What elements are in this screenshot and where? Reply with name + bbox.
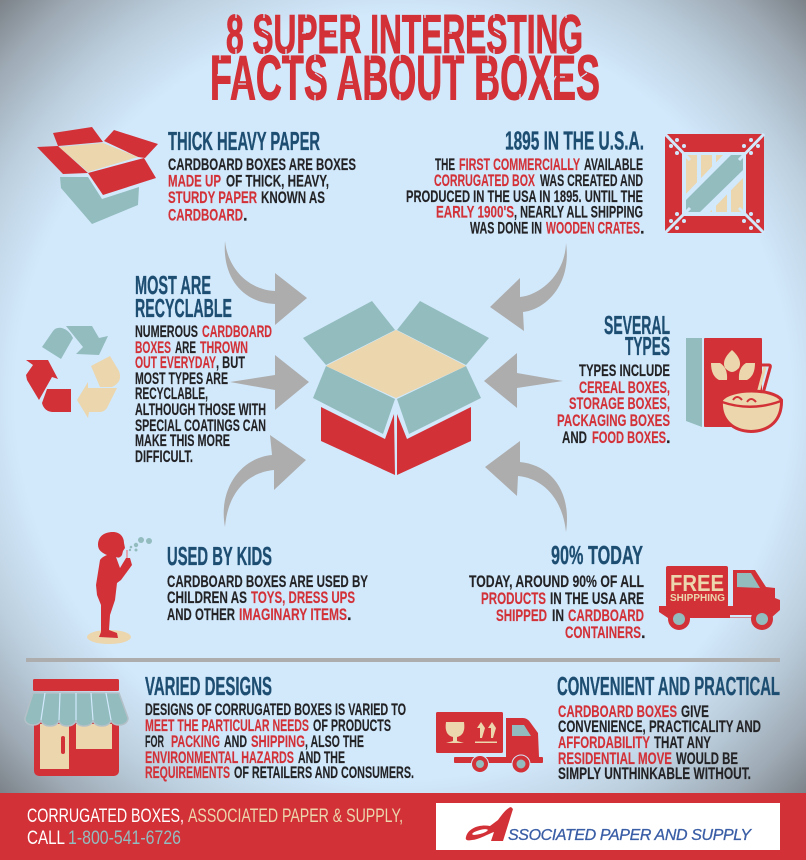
text block: most are recyclable: ARE (175, 339, 196, 357)
text block: convenient and practical: AFFORDABILITY (558, 734, 650, 752)
panel: convenient and practical (557, 671, 780, 783)
footer text: CORRUGATED BOXES, (27, 806, 184, 827)
text block: convenient and practical: THAT ANY (654, 734, 711, 752)
arrow: top left (225, 241, 307, 325)
text block: convenient and practical: RESIDENTIAL MOVE (558, 750, 672, 768)
heading: most are recyclable (135, 270, 232, 323)
icon: storefront (25, 679, 128, 776)
divider (26, 658, 780, 662)
text block: several types: FOOD BOXES (592, 429, 666, 447)
text block: thick heavy paper: KNOWN AS (261, 189, 325, 207)
heading: most are recyclable: RECYCLABLE (135, 293, 232, 323)
panel: most are recyclable (135, 270, 272, 466)
text block: used by kids: TOYS, DRESS UPS (251, 589, 355, 607)
footer text (27, 806, 403, 849)
panel: 1895 in the usa (406, 126, 645, 238)
icon: free shipping truck: FREE (670, 570, 724, 596)
arrow: bottom right (485, 441, 567, 532)
text block: thick heavy paper (168, 156, 356, 224)
text block: used by kids: CHILDREN AS (167, 589, 247, 607)
text block: 90 percent today: IN THE USA ARE (550, 590, 644, 608)
text block: 1895 in the usa: EARLY 1900'S (436, 204, 514, 222)
text block: convenient and practical: GIVE (681, 703, 709, 721)
text block: 90 percent today: PRODUCTS (481, 590, 546, 608)
text block: most are recyclable (135, 323, 272, 466)
icon: central open box (303, 301, 489, 475)
text block: used by kids: . (347, 606, 352, 624)
text block: thick heavy paper: OF THICK, HEAVY, (226, 172, 329, 190)
text block: 1895 in the usa: . (640, 220, 645, 238)
text block: 1895 in the usa: WAS DONE IN (470, 220, 542, 238)
icon: recycling arrows (26, 326, 120, 418)
text block: 1895 in the usa: PRODUCED IN THE USA IN 1895. UNTIL THE (406, 188, 643, 206)
panel: thick heavy paper (168, 126, 356, 224)
text block: several types: PACKAGING BOXES (557, 412, 670, 430)
text block: several types: STORAGE BOXES, (569, 395, 670, 413)
text block: most are recyclable: BOXES (135, 339, 171, 357)
text block: most are recyclable: ALTHOUGH THOSE WITH (135, 401, 266, 419)
text block: varied designs: SHIPPING (251, 733, 305, 751)
text block: used by kids (167, 573, 368, 624)
text block: most are recyclable: OUT EVERYDAY (135, 354, 216, 372)
text block: several types: AND (562, 429, 587, 447)
text block: 1895 in the usa: WOODEN CRATES (546, 220, 640, 238)
heading: used by kids: USED BY KIDS (167, 541, 272, 571)
logo: associated paper and supply (436, 803, 780, 850)
text block: varied designs: OF RETAILERS AND CONSUMERS. (234, 764, 414, 782)
text block: convenient and practical: WOULD BE (676, 750, 738, 768)
heading: most are recyclable: MOST ARE (135, 270, 211, 300)
text block: 1895 in the usa: FIRST COMMERCIALLY (459, 156, 580, 174)
text block: 1895 in the usa: THE (435, 156, 455, 174)
footer text: 1-800-541-6726 (68, 828, 181, 849)
text block: thick heavy paper: MADE UP (168, 172, 221, 190)
text block: most are recyclable: RECYCLABLE, (135, 385, 208, 403)
text block: 90 percent today: CARDBOARD (568, 607, 644, 625)
text block: convenient and practical (558, 703, 761, 783)
panel: used by kids (167, 541, 368, 624)
heading: 1895 in the usa: 1895 IN THE U.S.A. (505, 126, 644, 156)
text block: used by kids: CARDBOARD BOXES ARE USED BY (167, 573, 368, 591)
text block: 90 percent today: CONTAINERS (565, 624, 641, 642)
heading: several types (604, 310, 670, 361)
text block: varied designs: PACKING (171, 733, 220, 751)
text block: used by kids: AND OTHER (167, 606, 235, 624)
heading: thick heavy paper: THICK HEAVY PAPER (168, 126, 320, 156)
text block: most are recyclable: SPECIAL COATINGS CAN (135, 417, 266, 435)
arrow: top right (490, 243, 567, 331)
text block: thick heavy paper: . (243, 206, 248, 224)
icon: delivery truck (436, 712, 543, 773)
icon: cereal box and bowl (686, 338, 782, 432)
heading: several types: SEVERAL (604, 310, 670, 340)
text block: most are recyclable: DIFFICULT. (135, 448, 193, 466)
text block: 90 percent today: SHIPPED (496, 607, 547, 625)
footer text: CALL (27, 828, 65, 849)
text block: thick heavy paper: CARDBOARD (168, 206, 243, 224)
text block: most are recyclable: THROWN (200, 339, 248, 357)
text block: 1895 in the usa: WAS CREATED AND (540, 172, 643, 190)
icon: free shipping truck (659, 566, 780, 630)
text block: 1895 in the usa: , NEARLY ALL SHIPPING (514, 204, 643, 222)
text block: thick heavy paper: CARDBOARD BOXES ARE BOXES (168, 156, 356, 174)
text block: 90 percent today: IN (552, 607, 564, 625)
footer text: ASSOCIATED PAPER & SUPPLY, (188, 806, 403, 827)
text block: most are recyclable: MAKE THIS MORE (135, 432, 230, 450)
arrow: middle right (484, 353, 563, 408)
text block: several types: CEREAL BOXES, (579, 379, 670, 397)
title (210, 3, 600, 114)
icon: open cardboard box (37, 127, 158, 224)
text block: varied designs: DESIGNS OF CORRUGATED BOXES IS VARIED TO (145, 701, 406, 719)
text block: varied designs: AND THE (298, 749, 345, 767)
text block: most are recyclable: MOST TYPES ARE (135, 370, 228, 388)
text block: most are recyclable: , BUT (216, 354, 245, 372)
icon: wooden crate (665, 134, 764, 233)
heading: 90 percent today: 90% TODAY (551, 540, 643, 570)
text block: 90 percent today: . (641, 624, 646, 642)
text block: most are recyclable: CARDBOARD (202, 323, 272, 341)
icon: child blowing bubbles (87, 532, 152, 644)
text block: varied designs: REQUIREMENTS (145, 764, 230, 782)
text block: varied designs: OF PRODUCTS (313, 717, 391, 735)
panel: varied designs (145, 671, 414, 782)
panel: several types (557, 310, 671, 447)
text block: varied designs (145, 701, 414, 782)
text block: several types: TYPES INCLUDE (579, 362, 670, 380)
text block: varied designs: ENVIRONMENTAL HAZARDS (145, 749, 294, 767)
heading: varied designs: VARIED DESIGNS (145, 671, 272, 701)
text block: used by kids: IMAGINARY ITEMS (239, 606, 347, 624)
arrow: bottom left (224, 435, 306, 527)
panel: 90 percent today (469, 540, 646, 642)
text block: 1895 in the usa: CORRUGATED BOX (434, 172, 535, 190)
text block: several types: . (666, 429, 671, 447)
text block: convenient and practical: CARDBOARD BOXES (558, 703, 677, 721)
heading: several types: TYPES (625, 331, 670, 361)
text block: varied designs: AND (224, 733, 247, 751)
text block: 1895 in the usa (406, 156, 645, 238)
text block: several types (557, 362, 671, 447)
icon: free shipping truck: SHIPPHING (670, 592, 725, 604)
text block: varied designs: MEET THE PARTICULAR NEEDS (145, 717, 309, 735)
arrow: middle left (230, 355, 309, 410)
logo: associated paper and supply: SSOCIATED PAPER AND SUPPLY (508, 827, 752, 844)
text block: varied designs: , ALSO THE (305, 733, 364, 751)
text block: 1895 in the usa: AVAILABLE (584, 156, 643, 174)
text block: 90 percent today: TODAY, AROUND 90% OF ALL (469, 573, 644, 591)
text block: thick heavy paper: STURDY PAPER (168, 189, 257, 207)
text block: 90 percent today (469, 573, 646, 642)
text block: varied designs: FOR (145, 733, 164, 751)
footer band (0, 793, 806, 860)
text block: most are recyclable: NUMEROUS (135, 323, 198, 341)
